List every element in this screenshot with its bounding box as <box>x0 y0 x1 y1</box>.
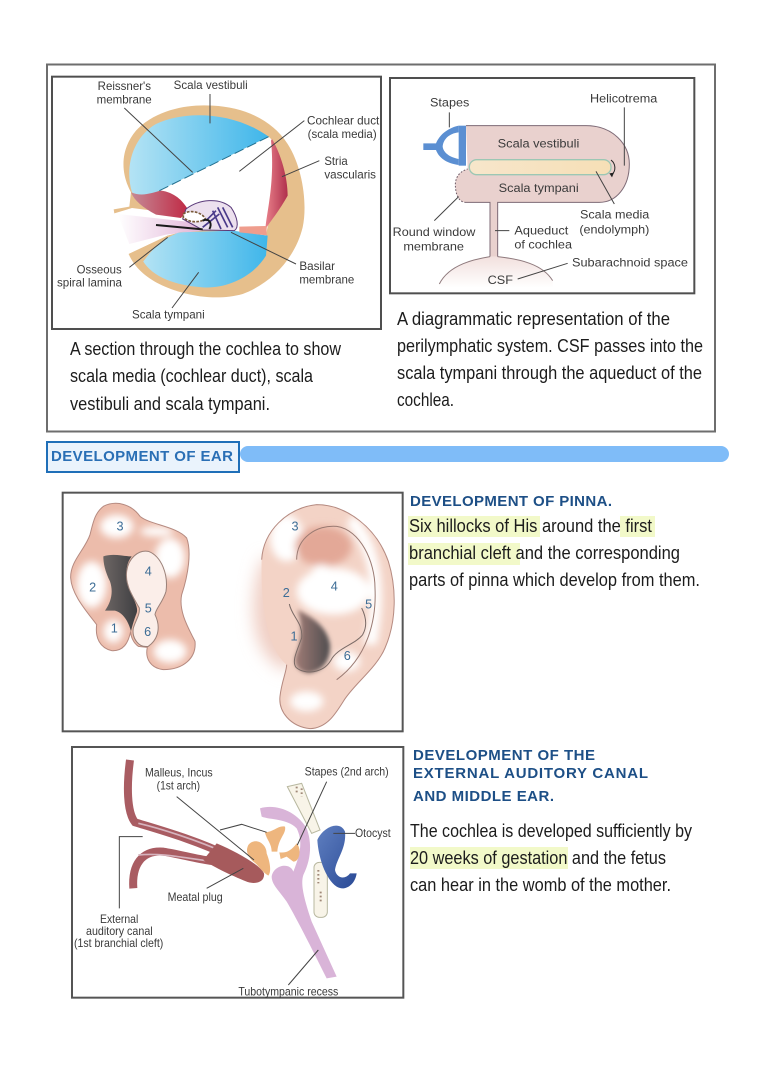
embryonic hillocks: 1 <box>111 621 118 635</box>
labels: membrane <box>403 240 464 253</box>
labels: Reissner's <box>98 80 151 93</box>
stria vascularis <box>265 139 288 236</box>
adult pinna: 1 <box>290 630 298 644</box>
adult pinna: 5 <box>365 598 372 612</box>
first branchial cleft canal <box>128 760 264 888</box>
nerve fibre fan <box>118 214 203 244</box>
text block: external auditory canal and middle ear: EXTERNAL AUDITORY CANAL <box>413 765 648 782</box>
caption: cochlea section: scala media (cochlear duct), scala <box>70 366 314 386</box>
labels: Stria <box>324 155 348 168</box>
adult pinna: 6 <box>344 649 351 663</box>
embryonic hillocks: 3 <box>116 519 124 533</box>
labels: External <box>100 913 138 926</box>
scala vestibuli fill <box>129 115 269 195</box>
organ of Corti <box>156 201 237 231</box>
helicotrema arrow <box>611 160 615 175</box>
labels: Scala tympani <box>499 182 579 195</box>
caption: perilymphatic system: cochlea. <box>397 390 454 410</box>
CSF space <box>439 257 553 288</box>
caption: cochlea section: A section through the cochlea to show <box>70 339 342 359</box>
adult pinna: 2 <box>283 586 290 600</box>
otocyst <box>317 826 357 888</box>
spiral ligament band <box>239 226 267 235</box>
scala media duct <box>469 160 611 175</box>
text block: development of pinna: branchial cleft and the corresponding <box>409 543 680 563</box>
labels: Scala media <box>580 208 650 221</box>
scala tympani fill <box>143 231 268 287</box>
adult pinna: 3 <box>291 520 299 534</box>
leaders <box>434 107 624 279</box>
labels: membrane <box>299 273 354 286</box>
labels: Scala vestibuli <box>498 138 579 151</box>
text block: development of pinna: parts of pinna which develop from them. <box>409 570 700 590</box>
caption: perilymphatic system <box>397 309 703 410</box>
Reissner membrane dashes <box>159 137 269 191</box>
diagram: cochlea cross-section <box>52 77 381 329</box>
leaders <box>119 782 355 985</box>
labels: (1st branchial cleft) <box>74 937 163 950</box>
labels <box>74 766 391 999</box>
labels: Cochlear duct <box>307 115 380 128</box>
text block: external auditory canal and middle ear: DEVELOPMENT OF THE <box>413 747 595 764</box>
osseous spiral lamina lip <box>129 230 193 261</box>
text block: external auditory canal and middle ear: 20 weeks of gestation and the fetus <box>410 848 666 868</box>
labels: auditory canal <box>86 925 153 938</box>
text block: development of pinna: Six hillocks of His around the first <box>409 516 652 536</box>
embryonic hillocks: 5 <box>145 602 152 616</box>
labels: Scala vestibuli <box>174 79 248 92</box>
labels: (1st arch) <box>157 779 200 792</box>
text block: external auditory canal and middle ear <box>410 747 692 895</box>
labels: vascularis <box>324 169 376 182</box>
adult pinna <box>247 498 403 735</box>
caption: perilymphatic system: scala tympani through the aqueduct of the <box>397 363 702 383</box>
caption: cochlea section <box>70 339 342 414</box>
caption: perilymphatic system: perilymphatic system. CSF passes into the <box>397 336 703 356</box>
labels: Tubotympanic recess <box>238 986 338 999</box>
scala media white space <box>159 137 274 236</box>
labels: (scala media) <box>308 128 377 141</box>
infographic page <box>46 64 729 999</box>
figure: hillocks of His and pinna <box>63 493 403 735</box>
labels: Stapes <box>430 96 470 109</box>
labels: of cochlea <box>514 239 573 252</box>
labels: CSF <box>488 274 513 287</box>
caption: cochlea section: vestibuli and scala tympani. <box>70 394 270 414</box>
labels: (endolymph) <box>579 223 649 236</box>
leader lines <box>124 94 319 308</box>
figure: external auditory canal and middle ear <box>72 747 403 999</box>
otic rods <box>287 783 327 917</box>
labels: Stapes (2nd arch) <box>305 766 389 779</box>
labels: Helicotrema <box>590 92 658 105</box>
text block: development of pinna <box>408 493 700 590</box>
section heading: development of ear <box>47 442 729 472</box>
labels: Subarachnoid space <box>572 257 688 270</box>
labels: Scala tympani <box>132 309 205 322</box>
adult pinna: 4 <box>331 580 338 594</box>
labels: Round window <box>393 226 476 239</box>
labels: Otocyst <box>355 827 391 840</box>
labels: Malleus, Incus <box>145 767 213 780</box>
section heading: development of ear: DEVELOPMENT OF EAR <box>51 448 233 465</box>
tubotympanic recess <box>260 807 337 978</box>
diagram: perilymphatic system <box>390 78 694 293</box>
ossicles <box>247 826 300 876</box>
text block: external auditory canal and middle ear: AND MIDDLE EAR. <box>413 788 554 805</box>
labels: Osseous <box>77 263 122 276</box>
spiral limbus <box>131 191 188 218</box>
embryonic hillocks: 6 <box>144 625 151 639</box>
labels: Aqueduct <box>514 224 569 237</box>
labels: Meatal plug <box>168 891 223 904</box>
stapes <box>423 126 466 166</box>
text block: external auditory canal and middle ear: The cochlea is developed sufficiently by <box>410 821 692 841</box>
labels: spiral lamina <box>57 277 123 290</box>
bony wall <box>114 105 305 297</box>
text block: development of pinna: DEVELOPMENT OF PINNA. <box>410 493 612 510</box>
panel: cochlea sections <box>47 64 715 432</box>
labels <box>393 92 688 287</box>
labels: membrane <box>97 93 152 106</box>
caption: perilymphatic system: A diagrammatic representation of the <box>397 309 670 329</box>
text block: external auditory canal and middle ear: can hear in the womb of the mother. <box>410 875 671 895</box>
labels <box>57 79 380 322</box>
embryonic hillocks: 4 <box>145 565 152 579</box>
perilymph body <box>455 126 629 257</box>
embryonic hillocks: 2 <box>89 580 96 594</box>
embryonic hillocks <box>70 502 196 670</box>
labels: Basilar <box>299 260 335 273</box>
